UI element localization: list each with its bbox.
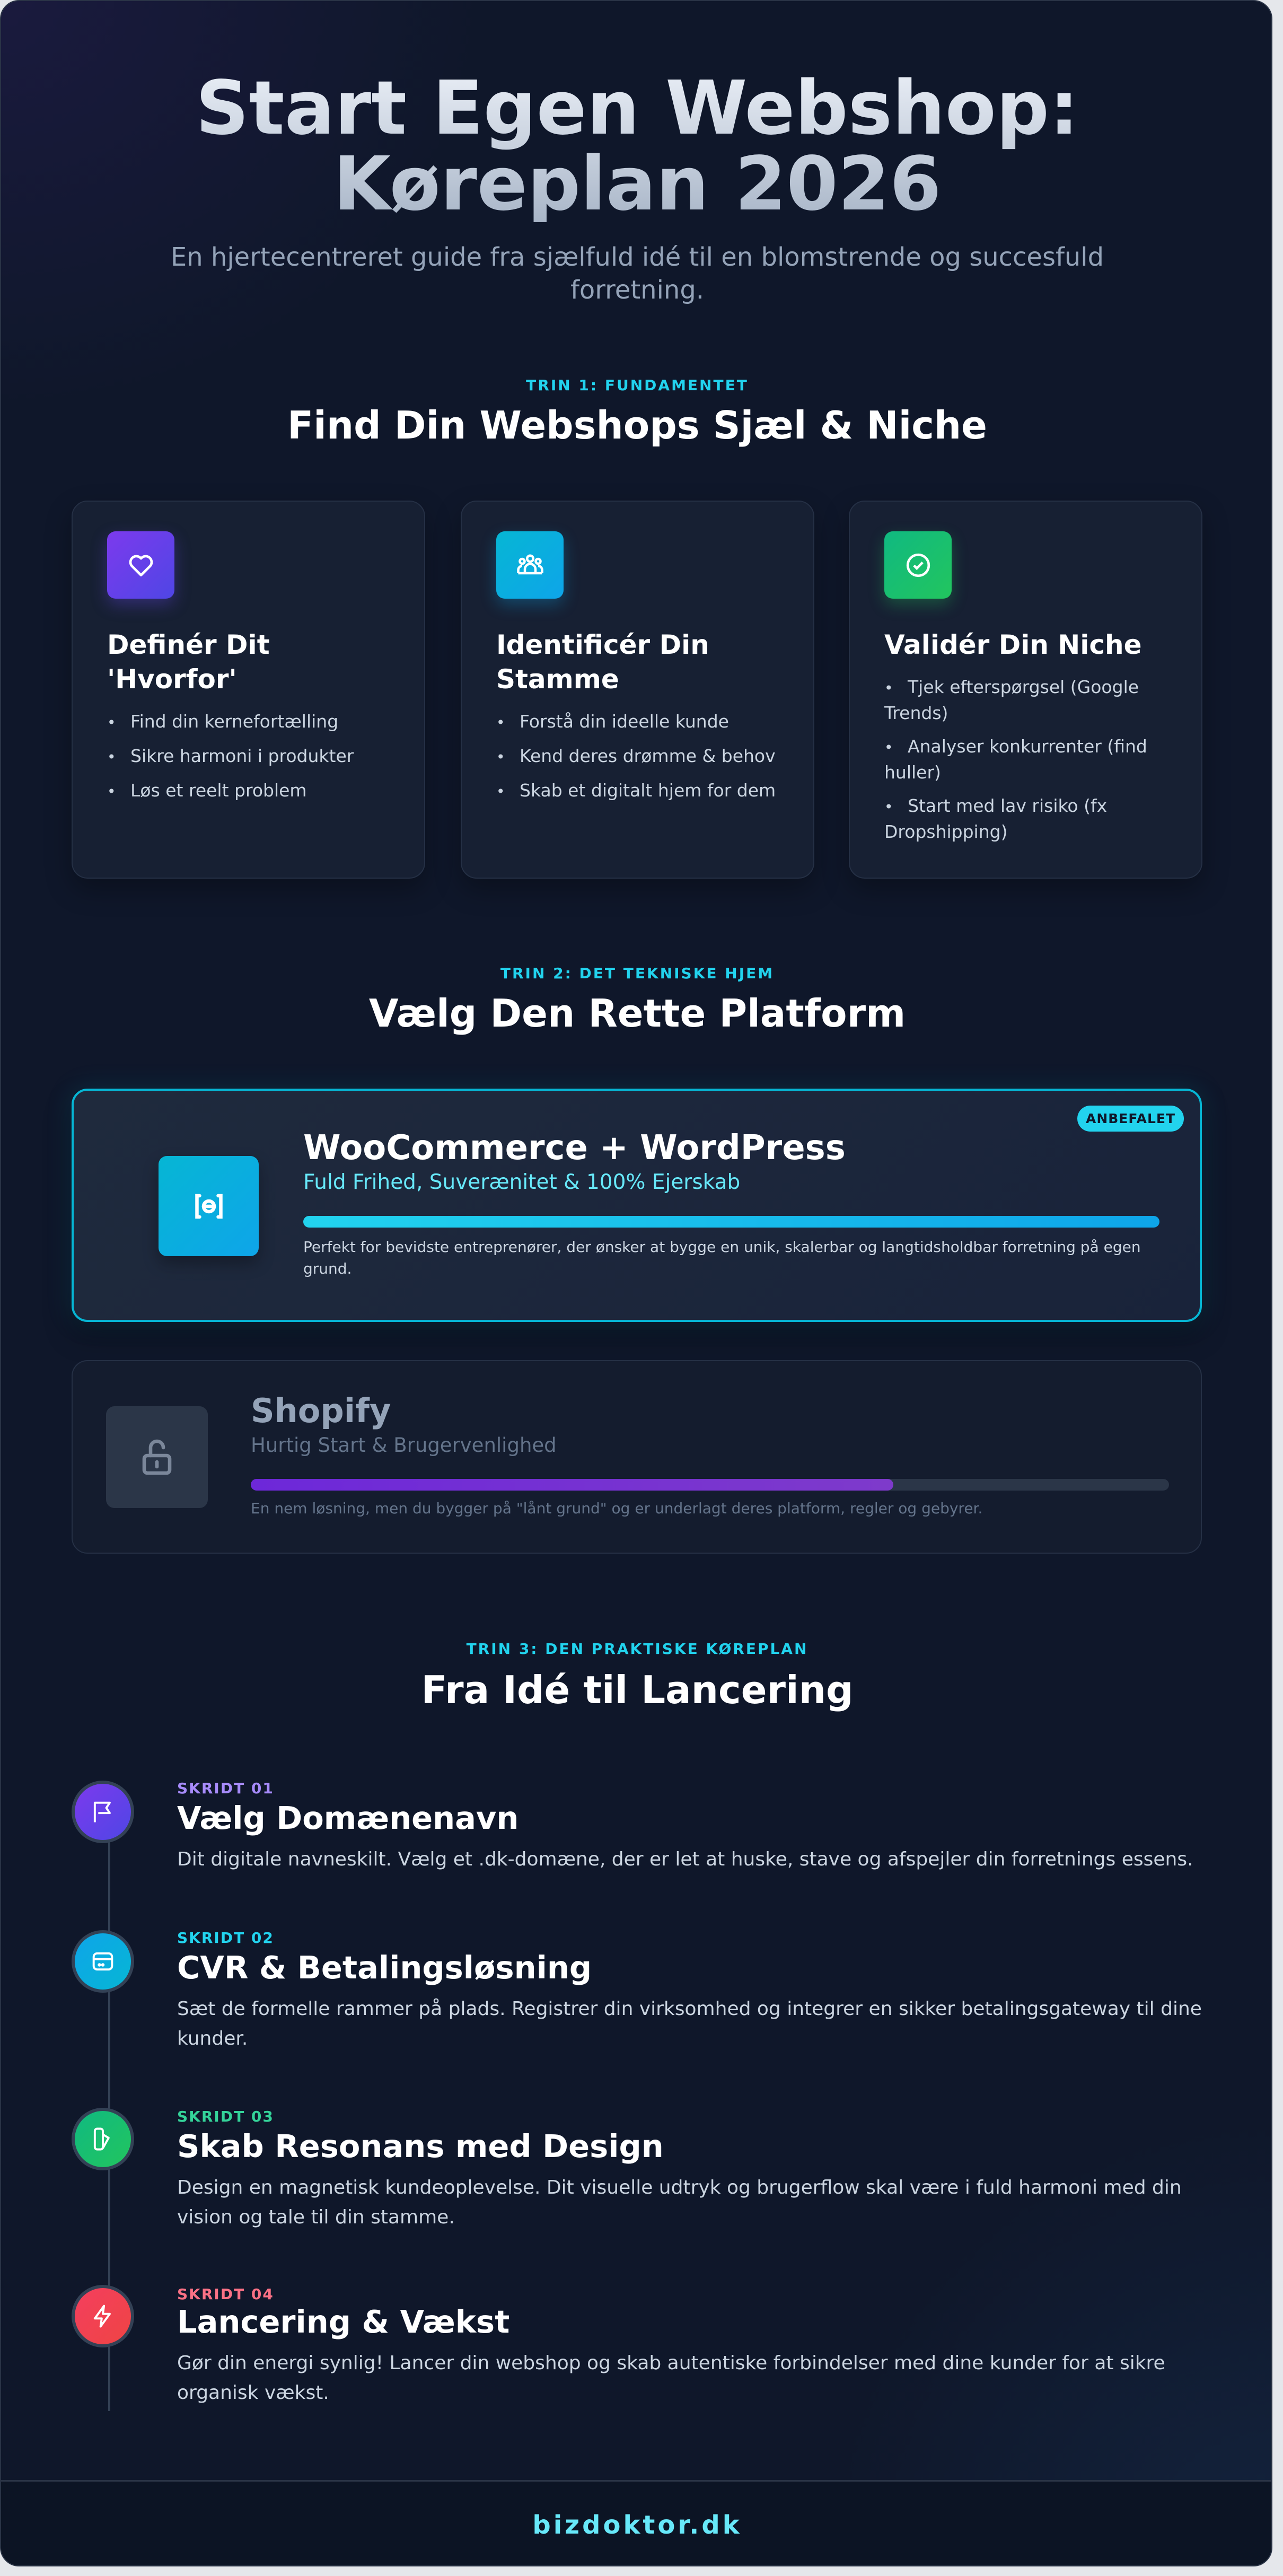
description: Perfekt for bevidste entreprenører, der ønsker at bygge en unik, skalerbar og langtidsholdbar forretning på egen grund. (303, 1238, 1141, 1277)
badge: anbefalet (1077, 1106, 1184, 1132)
icon: people (496, 531, 564, 599)
icon: card (72, 1930, 134, 1993)
bullet list: Find din kernefortælling (130, 711, 338, 732)
bullet list (109, 711, 354, 801)
title (1, 71, 1273, 222)
bullet list: Forstå din ideelle kunde (520, 711, 729, 732)
badge: anbefalet: ANBEFALET (1086, 1111, 1175, 1126)
icon: padlock (106, 1406, 208, 1508)
progress bar (303, 1216, 1159, 1228)
bullet list: Kend deres drømme & behov (520, 746, 776, 766)
step 04: Lancering & Vækst (177, 2303, 509, 2340)
title: Start Egen Webshop: (196, 65, 1079, 152)
section 3 heading: Fra Idé til Lancering (421, 1668, 854, 1712)
step 03 (177, 2108, 1182, 2228)
title: Shopify (251, 1391, 391, 1430)
bullet list (498, 711, 776, 801)
step 04: SKRIDT 04 (177, 2285, 274, 2303)
step 03: Design en magnetisk kundeoplevelse. Dit visuelle udtryk og brugerflow skal være i fuld harmoni med din vision og tale til din stamme. (177, 2177, 1182, 2228)
footer brand: bizdoktor.dk (532, 2510, 742, 2540)
subtitle: Hurtig Start & Brugervenlighed (251, 1434, 557, 1457)
panel: woocommerce (72, 1089, 1202, 1322)
card title: Identificér Din Stamme (496, 629, 709, 695)
step 03: Skab Resonans med Design (177, 2128, 664, 2165)
step 02: CVR & Betalingsløsning (177, 1949, 592, 1986)
section 1 label: TRIN 1: FUNDAMENTET (526, 376, 749, 394)
step 02: Sæt de formelle rammer på plads. Registrer din virksomhed og integrer en sikker betalingsgateway til dine kunder. (177, 1998, 1202, 2049)
panel: validate niche (849, 501, 1202, 879)
step 04 (177, 2285, 1165, 2404)
section 2 heading: Vælg Den Rette Platform (369, 991, 906, 1036)
icon: lightning (72, 2285, 134, 2347)
timeline (108, 1842, 110, 2411)
panel: shopify (72, 1360, 1202, 1554)
step 04: Gør din energi synlig! Lancer din webshop og skab autentiske forbindelser med dine kunder for at sikre organisk vækst. (177, 2352, 1165, 2404)
section 1 heading: Find Din Webshops Sjæl & Niche (287, 403, 987, 448)
icon: woo (159, 1156, 259, 1256)
bullet list: Start med lav risiko (fx Dropshipping) (884, 795, 1107, 842)
icon: flag (72, 1781, 134, 1843)
step 01: SKRIDT 01 (177, 1780, 274, 1797)
icon: design (72, 2108, 134, 2170)
step 03: SKRIDT 03 (177, 2108, 274, 2125)
title: Køreplan 2026 (333, 141, 941, 227)
progress bar (251, 1479, 1169, 1491)
step 01: Vælg Domænenavn (177, 1800, 519, 1836)
bullet list: Analyser konkurrenter (find huller) (884, 736, 1147, 783)
bullet list: Skab et digitalt hjem for dem (520, 780, 776, 801)
icon: heart (107, 531, 174, 599)
step 02 (177, 1929, 1202, 2049)
step 01: Dit digitale navneskilt. Vælg et .dk-domæne, der er let at huske, stave og afspejler din forretnings essens. (177, 1848, 1193, 1870)
section 2 label: TRIN 2: DET TEKNISKE HJEM (500, 965, 774, 982)
bullet list (884, 677, 1147, 842)
bullet list: Tjek efterspørgsel (Google Trends) (884, 677, 1139, 723)
step 01 (177, 1780, 1193, 1870)
bullet list: Løs et reelt problem (130, 780, 307, 801)
section 3 label: TRIN 3: DEN PRAKTISKE KØREPLAN (467, 1640, 808, 1658)
step 02: SKRIDT 02 (177, 1929, 274, 1947)
subtitle: En hjertecentreret guide fra sjælfuld idé til en blomstrende og succesfuld forretning. (171, 242, 1104, 305)
card title: Validér Din Niche (884, 629, 1142, 660)
panel: define why (72, 501, 425, 879)
description: En nem løsning, men du bygger på "lånt grund" og er underlagt deres platform, regler og gebyrer. (251, 1500, 982, 1517)
subtitle: Fuld Frihed, Suverænitet & 100% Ejerskab (303, 1170, 740, 1194)
card title: Definér Dit 'Hvorfor' (107, 629, 270, 695)
title: WooCommerce + WordPress (303, 1128, 846, 1168)
bullet list: Sikre harmoni i produkter (130, 746, 354, 766)
icon: check (884, 531, 952, 599)
panel: identify tribe (461, 501, 814, 879)
footer (1, 2480, 1273, 2570)
